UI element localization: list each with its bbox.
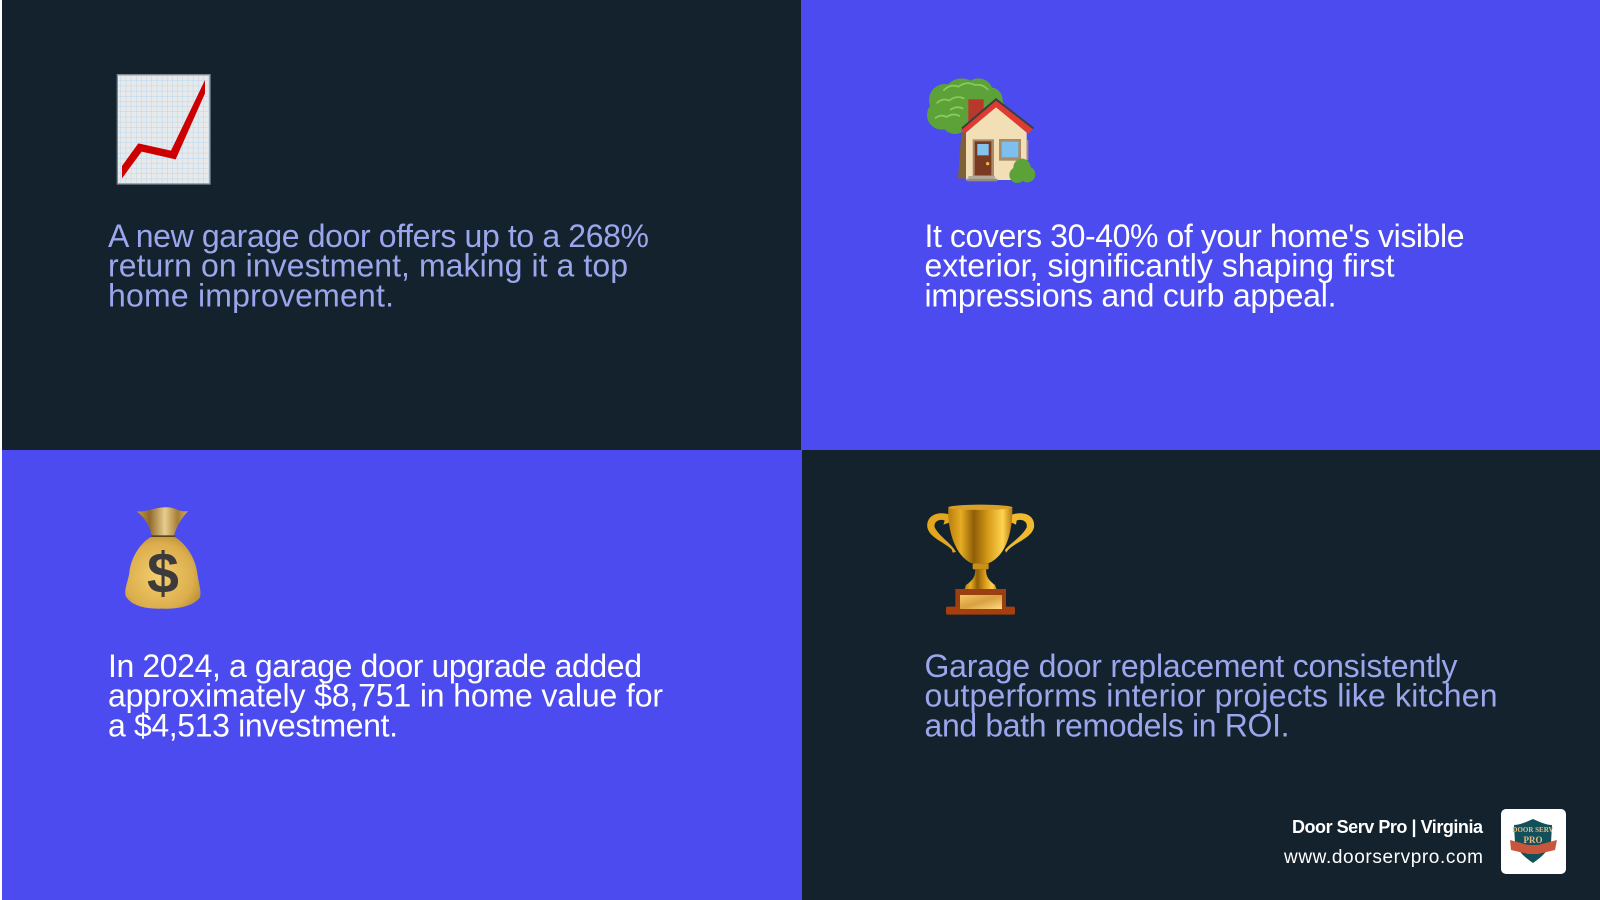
icon: trophy — [927, 505, 1034, 615]
text: ROI statement: home improvement. — [108, 278, 394, 314]
icon: rising chart — [117, 74, 211, 185]
logo: Door Serv Pro badge: DOOR SERV — [1512, 826, 1554, 834]
text: curb appeal statement — [924, 218, 1464, 314]
panel: bottom left background — [2, 450, 802, 900]
footer: brand name and website — [1283, 817, 1484, 868]
logo: Door Serv Pro badge — [1501, 809, 1566, 874]
text: curb appeal statement: exterior, significantly shaping first — [924, 248, 1395, 284]
icon: house with tree — [927, 78, 1035, 183]
panel: top right background — [801, 0, 1600, 450]
icon: money bag — [125, 507, 200, 609]
text: ROI statement: return on investment, making it a top — [108, 248, 628, 284]
footer: brand name and website: Door Serv Pro | Virginia — [1292, 817, 1484, 837]
panel: top left background — [2, 0, 801, 450]
panel: bottom right background — [802, 450, 1600, 900]
text: curb appeal statement: impressions and curb appeal. — [924, 278, 1336, 314]
text: comparison statement: Garage door replacement consistently — [924, 648, 1458, 684]
text: comparison statement: outperforms interior projects like kitchen — [924, 678, 1498, 714]
text: home value statement: approximately $8,751 in home value for — [108, 678, 663, 714]
text: comparison statement: and bath remodels in ROI. — [924, 708, 1290, 744]
text: ROI statement: A new garage door offers up to a 268% — [108, 218, 649, 254]
text: ROI statement — [108, 218, 649, 314]
icon: money bag: $ — [147, 542, 179, 606]
text: home value statement: a $4,513 investment. — [108, 708, 398, 744]
footer: brand name and website: www.doorservpro.com — [1283, 847, 1483, 868]
text: home value statement: In 2024, a garage door upgrade added — [108, 648, 642, 684]
text: comparison statement — [924, 648, 1498, 744]
logo: Door Serv Pro badge: PRO — [1524, 835, 1542, 845]
text: curb appeal statement: It covers 30-40% of your home's visible — [924, 218, 1464, 254]
text: home value statement — [108, 648, 663, 744]
